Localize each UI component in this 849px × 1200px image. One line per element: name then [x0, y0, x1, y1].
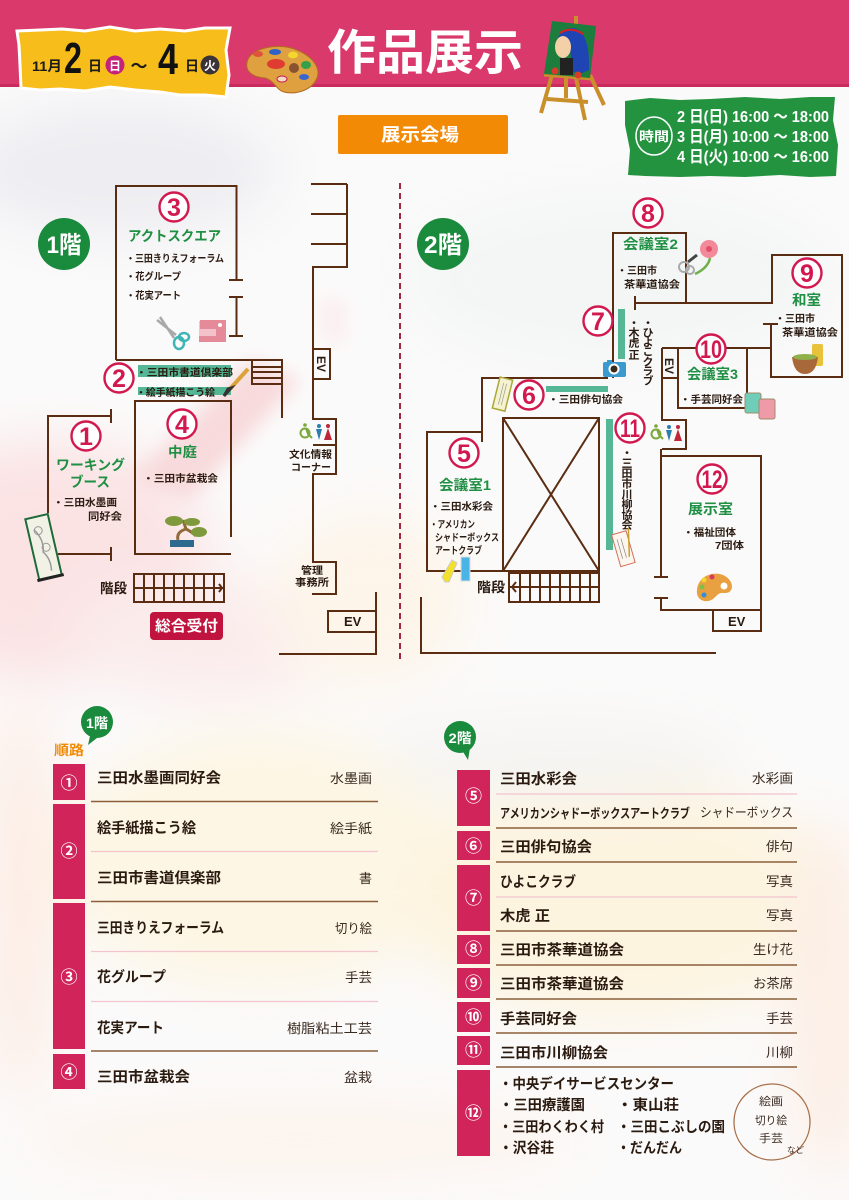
room 10: meeting room 3 — [680, 334, 743, 406]
rows: 水墨画 — [330, 771, 372, 786]
elevator labels 2F — [662, 358, 746, 629]
icon: paint tubes — [442, 557, 470, 582]
floor plan: 1st floor — [23, 184, 376, 654]
heading button: exhibition venue — [338, 115, 508, 154]
number blocks — [457, 770, 490, 1156]
room 9: Japanese room: ・三田市 — [775, 312, 815, 325]
room 10: meeting room 3: 10 — [700, 336, 722, 364]
floor badge: 2F: 2階 — [424, 232, 462, 259]
icon: flower and shears — [679, 240, 718, 274]
icon: small palette — [697, 574, 732, 601]
room 11 — [616, 414, 644, 531]
icon: thread spools — [745, 393, 775, 419]
room 2: 2 — [112, 365, 126, 393]
room 12: exhibition room — [683, 464, 744, 552]
rows: 手芸 — [345, 970, 372, 985]
room 1: working booth: ・三田水墨画 — [53, 496, 117, 509]
room 4: courtyard: ・三田市盆栽会 — [143, 472, 218, 485]
room 7: ・木虎 正 — [627, 317, 640, 360]
floor badge: 1F: 1階 — [46, 232, 82, 259]
room 9: Japanese room: 9 — [800, 260, 814, 288]
room 3: Act Square: 3 — [167, 194, 181, 222]
panel: 1st floor route table — [53, 706, 378, 1089]
floor plan: 2nd floor — [417, 198, 842, 653]
rows: 三田きりえフォーラム — [97, 920, 224, 937]
room 1: working booth: 同好会 — [88, 510, 122, 523]
number blocks: ⑦ — [465, 889, 482, 908]
divider lines — [91, 802, 378, 1051]
floor badge: 2F — [417, 218, 469, 270]
culture info corner label: 文化情報 — [289, 448, 332, 461]
callout: genres circle: 切り絵 — [755, 1114, 787, 1127]
row 12: welfare groups — [499, 1075, 725, 1157]
row 12: welfare groups: ・三田療護園 — [499, 1096, 585, 1114]
room 4: courtyard — [143, 410, 218, 485]
culture info corner label — [289, 448, 332, 474]
number blocks: ③ — [60, 968, 78, 987]
room 3: Act Square: ・花実アート — [126, 289, 181, 302]
row 12: welfare groups: ・三田わくわく村 — [499, 1119, 604, 1136]
row 12: welfare groups: ・沢谷荘 — [499, 1139, 554, 1157]
floor badge: 1F — [38, 218, 90, 270]
icon: sewing machine — [199, 320, 226, 342]
rows: 三田市書道倶楽部 — [97, 869, 222, 887]
room 1: working booth: 1 — [79, 423, 93, 451]
callout: genres circle: 手芸 — [759, 1131, 783, 1145]
room 5: meeting room 1 — [430, 438, 499, 557]
room 12: exhibition room: 12 — [702, 466, 722, 494]
room 1: working booth: ブース — [70, 474, 110, 490]
number blocks — [53, 764, 85, 1089]
room 5: meeting room 1: ・三田水彩会 — [430, 500, 493, 513]
rows: 盆栽 — [344, 1070, 372, 1085]
room 2 — [104, 364, 233, 399]
number blocks: ④ — [60, 1063, 78, 1082]
elevator labels 1F — [314, 356, 362, 629]
rows: 切り絵 — [335, 921, 372, 936]
date badge: ～ — [130, 57, 148, 76]
room 2: ・三田市書道倶楽部 — [136, 366, 233, 379]
office label: 事務所 — [295, 576, 329, 589]
room 8: meeting room 2: 会議室2 — [623, 236, 678, 252]
row 12: welfare groups: ・三田こぶしの園 — [617, 1119, 725, 1136]
elevator labels 1F: EV — [314, 356, 328, 372]
room 8: meeting room 2: 8 — [641, 200, 655, 228]
reception button: 総合受付 — [155, 617, 218, 635]
date badge — [17, 27, 230, 97]
panel: opening hours: 3 日(月) 10:00 ～ 18:00 — [677, 129, 829, 146]
icon: accessible restrooms 2F — [652, 424, 682, 441]
room 3: Act Square: アクトスクエア — [128, 228, 221, 244]
number blocks: ① — [60, 774, 78, 793]
room 5: meeting room 1: アートクラブ — [435, 544, 482, 557]
room 3: Act Square: ・三田きりえフォーラム — [126, 253, 224, 265]
rows: 三田水墨画同好会 — [97, 770, 222, 787]
number blocks: ⑧ — [465, 940, 482, 959]
rows: 木虎 正 — [500, 907, 550, 925]
room 1: working booth: ワーキング — [56, 457, 125, 473]
number blocks: ⑪ — [465, 1041, 482, 1060]
date badge: 日 — [109, 59, 121, 73]
icon: easel with portrait — [541, 16, 604, 120]
icon: paper and pen — [611, 528, 638, 567]
rows: 花グループ — [97, 968, 166, 986]
date badge: 11月 — [32, 58, 62, 74]
icon: accessible restrooms 1F — [300, 423, 332, 440]
room 7: 7 — [591, 308, 605, 336]
number blocks: ⑤ — [465, 787, 482, 806]
rows: シャドーボックス — [700, 805, 793, 820]
divider lines — [496, 794, 797, 1067]
room 4: courtyard: 中庭 — [168, 444, 197, 460]
room 7: ・ひよこクラブ — [641, 317, 654, 386]
rows: 手芸同好会 — [500, 1011, 578, 1028]
culture info corner label: コーナー — [291, 462, 331, 474]
reception button — [150, 612, 223, 640]
title: 作品展示 — [327, 27, 523, 80]
rows: 手芸 — [766, 1011, 793, 1026]
icon: tea bowl and whisk — [792, 344, 823, 374]
room 5: meeting room 1: 会議室1 — [439, 477, 491, 493]
number blocks: ⑨ — [465, 974, 482, 993]
header band — [0, 0, 849, 87]
heading button: exhibition venue: 展示会場 — [381, 125, 459, 145]
elevator labels 2F: EV — [662, 358, 676, 374]
callout: genres circle — [734, 1084, 810, 1160]
green display strips: room 2 — [138, 365, 231, 395]
number blocks: ⑥ — [465, 837, 482, 856]
panel: 2nd floor route table — [444, 721, 810, 1160]
rows — [97, 770, 372, 1086]
row 12: welfare groups: ・東山荘 — [617, 1096, 679, 1114]
walls: 2nd floor — [421, 233, 842, 653]
panel: opening hours: 2 日(日) 16:00 ～ 18:00 — [677, 109, 829, 126]
room 9: Japanese room: 和室 — [792, 292, 821, 308]
row 12: welfare groups: ・中央デイサービスセンター — [499, 1075, 674, 1093]
rows: 三田市茶華道協会 — [500, 975, 625, 993]
room 7 — [584, 306, 654, 386]
room 10: meeting room 3: 会議室3 — [687, 366, 738, 382]
room 3: Act Square — [126, 192, 224, 302]
route label: 順路 — [54, 743, 85, 758]
office label: 管理 — [301, 564, 323, 577]
floor divider — [399, 183, 401, 660]
elevator labels 2F: EV — [728, 614, 746, 629]
rows: 俳句 — [766, 839, 793, 854]
icon: bonsai — [165, 516, 207, 547]
rows: 三田市盆栽会 — [97, 1068, 191, 1086]
rows: 生け花 — [753, 942, 793, 957]
rows — [500, 771, 793, 1062]
speech bubble: 1F — [81, 706, 113, 745]
speech bubble: 2F — [444, 721, 476, 760]
rows: 水彩画 — [752, 771, 793, 786]
elevator labels 1F: EV — [344, 614, 362, 629]
room 1: working booth — [53, 422, 125, 523]
room 12: exhibition room: 展示室 — [688, 501, 733, 517]
rows: 川柳 — [766, 1045, 793, 1060]
row 12: welfare groups: ・だんだん — [617, 1140, 682, 1157]
room 5: meeting room 1: ・アメリカン — [430, 519, 475, 531]
date badge: 日 — [185, 58, 199, 74]
room 8: meeting room 2 — [617, 198, 680, 291]
rows: 絵手紙描こう絵 — [97, 819, 196, 837]
number blocks: ② — [60, 842, 78, 861]
room 9: Japanese room — [775, 258, 838, 339]
room 5: meeting room 1: シャドーボックス — [435, 532, 499, 544]
room 8: meeting room 2: ・三田市 — [617, 264, 657, 277]
room 12: exhibition room: ・福祉団体 — [683, 526, 736, 539]
rows: 三田俳句協会 — [500, 839, 593, 856]
rows: お茶席 — [753, 976, 793, 991]
rows: 花実アート — [97, 1019, 164, 1037]
icon: camera — [603, 360, 626, 377]
callout: genres circle: 絵画 — [759, 1095, 783, 1108]
stairs label: 1F: 階段 — [100, 581, 127, 596]
date badge: 日 — [88, 58, 102, 74]
rows: 写真 — [766, 908, 793, 923]
icon: brush — [224, 369, 248, 396]
room 12: exhibition room: 7団体 — [715, 539, 744, 552]
icon: hanging scroll — [23, 514, 64, 582]
date badge: 2 — [64, 34, 82, 83]
room 5: meeting room 1: 5 — [457, 440, 471, 468]
icon: scissors — [157, 317, 189, 349]
icon: tanzaku card — [492, 377, 513, 411]
panel: opening hours: 時間 — [639, 129, 669, 144]
room 11: 11 — [620, 415, 640, 443]
room 2: ・絵手紙描こう絵 — [136, 386, 215, 399]
room 10: meeting room 3: ・手芸同好会 — [680, 393, 743, 406]
stairs label: 2F: 階段 — [477, 580, 506, 595]
speech bubble: 2F: 2階 — [448, 730, 472, 746]
office label — [295, 564, 329, 589]
walls: 1st floor — [48, 184, 376, 654]
speech bubble: 1F: 1階 — [86, 715, 108, 731]
number blocks: ⑩ — [465, 1008, 482, 1027]
panel: opening hours: 4 日(火) 10:00 ～ 16:00 — [677, 149, 829, 166]
room 6 — [514, 380, 623, 410]
rows: ひよこクラブ — [500, 873, 576, 891]
rows: アメリカンシャドーボックスアートクラブ — [500, 806, 690, 821]
rows: 三田水彩会 — [500, 771, 578, 788]
icon: artist palette — [247, 46, 318, 93]
room 11: ・三田市川柳協会 — [620, 447, 632, 531]
room 6: ・三田俳句協会 — [548, 393, 623, 406]
room 3: Act Square: ・花グループ — [126, 270, 181, 283]
number blocks: ⑫ — [465, 1104, 482, 1123]
date badge: 4 — [158, 35, 178, 84]
room 9: Japanese room: 茶華道協会 — [782, 326, 838, 339]
rows: 写真 — [766, 874, 793, 889]
rows: 三田市茶華道協会 — [500, 941, 625, 959]
rows: 三田市川柳協会 — [500, 1044, 609, 1062]
rows: 絵手紙 — [330, 821, 372, 836]
room 6: 6 — [522, 382, 536, 410]
callout: genres circle: など — [787, 1145, 805, 1155]
room 4: courtyard: 4 — [175, 411, 189, 439]
green display strips: rooms 6, 7, 11 — [546, 309, 625, 550]
rows: 樹脂粘土工芸 — [287, 1021, 372, 1036]
room 8: meeting room 2: 茶華道協会 — [624, 278, 680, 291]
rows: 書 — [359, 871, 372, 886]
panel: opening hours — [625, 97, 838, 177]
date badge: 火 — [204, 59, 216, 73]
